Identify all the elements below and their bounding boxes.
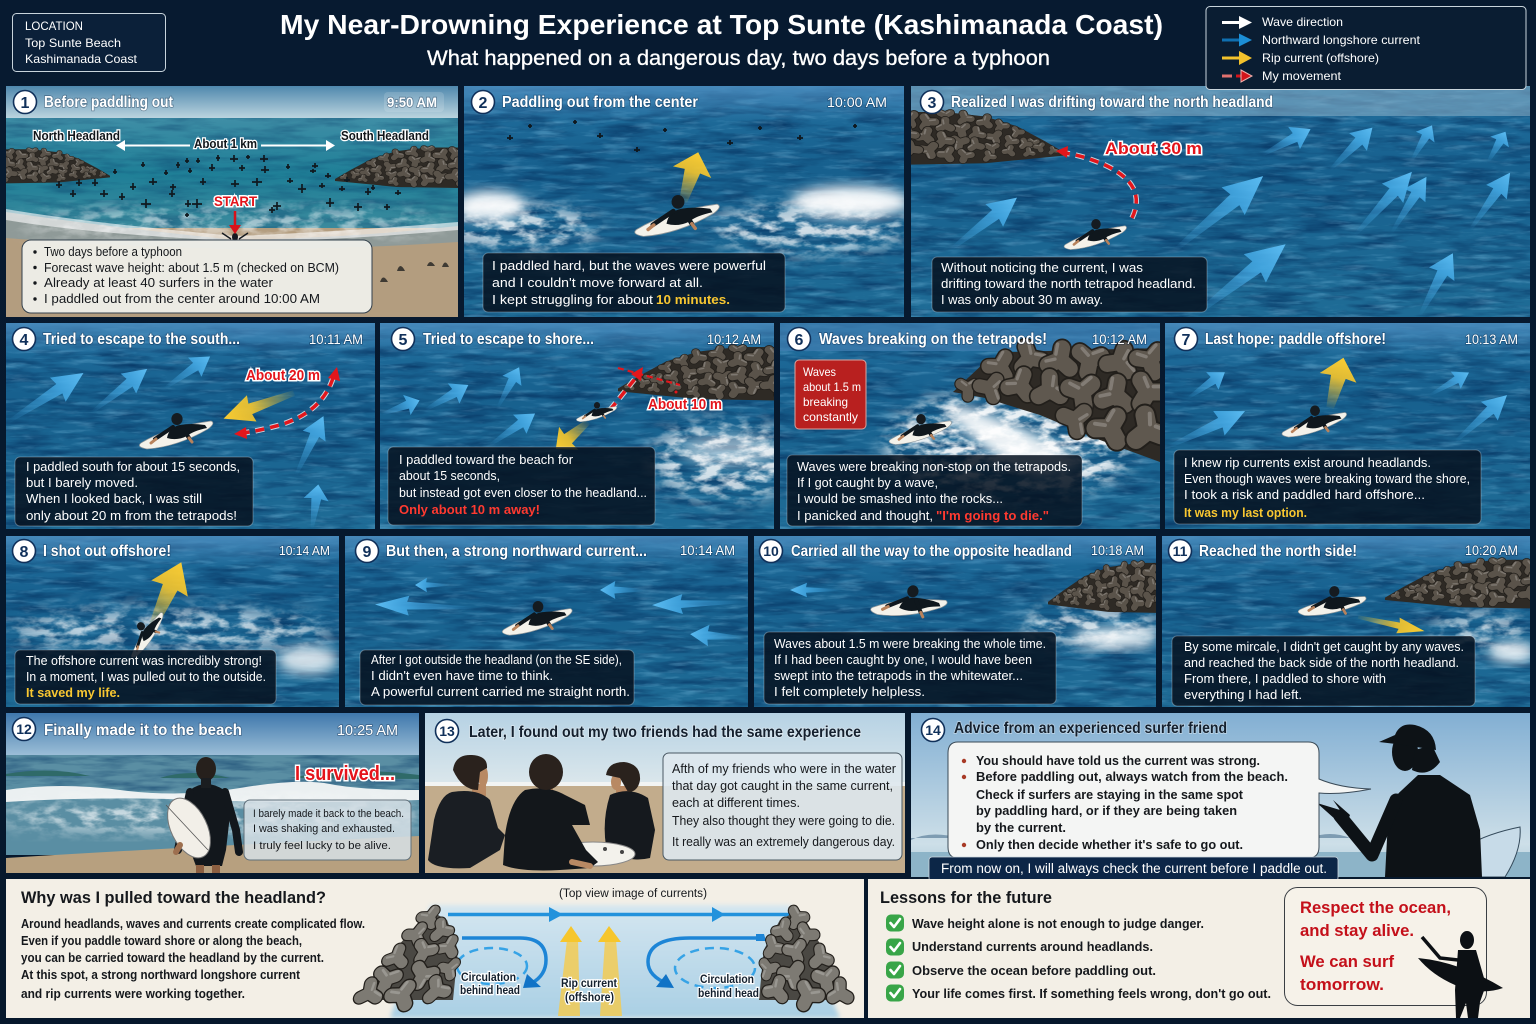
longshore current arrows <box>0 347 335 531</box>
friend silhouette <box>1317 724 1482 877</box>
header: 10:25 AM <box>337 722 398 739</box>
tetrapods <box>953 340 1170 462</box>
header <box>922 718 1227 742</box>
distance label: About 30 m <box>1105 139 1202 158</box>
north headland rocks <box>618 343 810 401</box>
longshore current arrows <box>941 118 1520 329</box>
surfer silhouette <box>1418 931 1503 1018</box>
speech bubble: Check if surfers are staying in the same spot <box>976 788 1244 802</box>
caption <box>483 253 785 312</box>
caption: I truly feel lucky to be alive. <box>253 840 391 852</box>
caption: I was only about 30 m away. <box>941 292 1103 307</box>
checklist: Observe the ocean before paddling out. <box>912 964 1156 978</box>
surfer on board <box>1282 405 1347 437</box>
panel 2: paddling out from the center <box>464 86 904 317</box>
header: 10:13 AM <box>1465 331 1518 347</box>
caption: I paddled hard, but the waves were powerful <box>492 258 766 273</box>
diagram labels: Rip current <box>561 978 617 990</box>
header: 10:14 AM <box>279 543 330 558</box>
caption <box>15 457 253 526</box>
explanation <box>21 917 365 1001</box>
red wave label <box>795 360 866 429</box>
header <box>760 540 1144 562</box>
header <box>1174 328 1518 350</box>
panel 5: escape to shore <box>380 323 774 529</box>
checklist: Understand currents around headlands. <box>912 940 1153 954</box>
caption: Without noticing the current, I was <box>941 260 1144 275</box>
right circulation arrow <box>648 934 766 988</box>
panel: lessons for the future <box>868 879 1530 1018</box>
surfboard <box>1437 827 1520 877</box>
diagram labels: behind head <box>698 988 759 1000</box>
rip current arrow <box>664 146 717 208</box>
surfer on board <box>576 402 617 422</box>
caption: Waves about 1.5 m were breaking the whole time. <box>774 637 1046 651</box>
caption <box>360 650 634 705</box>
caption: swept into the tetrapods in the whitewater... <box>774 669 1023 683</box>
caption: I kept struggling for about <box>492 292 653 307</box>
headland labels: North Headland <box>33 129 120 143</box>
header <box>436 720 861 742</box>
legend: wave direction: Wave direction <box>1262 15 1343 29</box>
info box <box>22 240 372 313</box>
friend three <box>605 762 655 860</box>
caption: each at different times. <box>672 796 800 810</box>
header <box>1168 540 1518 562</box>
diagram labels: Circulation <box>700 974 754 986</box>
longshore current line <box>448 907 800 922</box>
surfboard <box>551 842 635 866</box>
header: 10:18 AM <box>1091 542 1144 558</box>
header: Carried all the way to the opposite headland <box>791 543 1072 560</box>
caption: and I couldn't move forward at all. <box>492 275 703 290</box>
checklist: Wave height alone is not enough to judge danger. <box>912 917 1204 931</box>
header: 9:50 AM <box>387 94 437 110</box>
banner: from now on: From now on, I will always check the current before I paddle out. <box>941 861 1327 876</box>
heading: Why was I pulled toward the headland? <box>21 889 326 907</box>
panel 13: two friends <box>425 713 905 873</box>
header: I shot out offshore! <box>43 543 171 560</box>
header: Paddling out from the center <box>502 94 698 111</box>
location box: Top Sunte Beach <box>25 36 121 50</box>
rip current arrow <box>1312 353 1362 413</box>
longshore current arrow <box>790 583 840 597</box>
surfer at the start point <box>222 233 248 239</box>
message box <box>1284 888 1486 1006</box>
caption: I paddled south for about 15 seconds, <box>26 459 240 474</box>
friend two <box>503 754 598 870</box>
start marker <box>214 193 257 234</box>
panel 14: advice from friend <box>911 713 1530 877</box>
left circulation arrow <box>457 938 546 988</box>
checklist <box>886 914 1271 1002</box>
caption: It really was an extremely dangerous day. <box>672 835 895 849</box>
friend one <box>428 755 505 868</box>
north headland rocks <box>0 147 110 184</box>
legend: rip current: Rip current (offshore) <box>1262 51 1379 65</box>
caption <box>15 650 276 704</box>
header: 12 <box>16 721 32 737</box>
distant surfers <box>507 120 857 152</box>
caption: drifting toward the north tetrapod headland. <box>941 276 1196 291</box>
header: 10 <box>763 543 779 559</box>
caption: In a moment, I was pulled out to the outside. <box>26 670 266 684</box>
info box: Two days before a typhoon <box>44 244 182 259</box>
header: 10:11 AM <box>309 331 363 347</box>
speech bubble: You should have told us the current was strong. <box>976 754 1260 768</box>
header: Waves breaking on the tetrapods! <box>819 331 1047 348</box>
caption: but instead got even closer to the headland... <box>399 485 647 500</box>
header: 7 <box>1182 332 1191 349</box>
subtitle: What happened on a dangerous day, two days before a typhoon <box>427 47 1050 70</box>
header: 3 <box>928 95 937 112</box>
surfer on board <box>889 414 952 445</box>
longshore current arrows <box>1162 363 1515 459</box>
caption <box>932 257 1207 312</box>
caption: I panicked and thought, <box>797 508 933 523</box>
header: 1 <box>21 95 30 112</box>
my movement dashed arrow <box>1056 146 1136 218</box>
info box: I paddled out from the center around 10:00 AM <box>44 291 320 306</box>
header: 14 <box>925 722 941 738</box>
location box: Kashimanada Coast <box>25 52 138 66</box>
header: 10:14 AM <box>680 542 735 558</box>
caption: I didn't even have time to think. <box>371 669 553 683</box>
banner: from now on <box>929 857 1338 881</box>
person with surfboard <box>159 757 239 873</box>
caption: From there, I paddled to shore with <box>1184 672 1386 686</box>
diagram labels: Circulation <box>461 972 516 984</box>
caption: I felt completely helpless. <box>774 685 925 699</box>
panel 4: escape south <box>6 323 375 529</box>
diagram labels <box>460 972 759 1004</box>
caption: Waves were breaking non-stop on the tetrapods. <box>797 459 1071 474</box>
top view current diagram: (Top view image of currents) <box>559 888 707 900</box>
header <box>12 540 330 562</box>
header: 13 <box>439 723 455 739</box>
surfer on board <box>502 601 572 635</box>
caption <box>1174 450 1481 524</box>
caption: If I had been caught by one, I would have been <box>774 653 1032 667</box>
header: 8 <box>20 544 29 561</box>
caption: A powerful current carried me straight north. <box>371 685 630 699</box>
caption: Only about 10 m away! <box>399 502 540 517</box>
header <box>12 328 363 350</box>
explanation: Even if you paddle toward shore or along the beach, <box>21 934 302 948</box>
header: Advice from an experienced surfer friend <box>954 720 1227 737</box>
header: 10:12 AM <box>1092 331 1147 347</box>
headland labels: About 1 km <box>194 137 257 151</box>
panel 3: drifting toward north headland <box>911 86 1530 317</box>
header: But then, a strong northward current... <box>386 543 647 560</box>
panel 11: reached the north side <box>1162 536 1530 707</box>
caption: but I barely moved. <box>26 475 138 490</box>
caption: They also thought they were going to die. <box>672 814 895 828</box>
legend: longshore current: Northward longshore current <box>1262 33 1421 47</box>
foam <box>650 420 800 500</box>
header: Realized I was drifting toward the north headland <box>951 94 1273 111</box>
title: My Near-Drowning Experience at Top Sunte (Kashimanada Coast) <box>280 9 1163 40</box>
south headland rocks <box>335 144 484 188</box>
header <box>920 90 1273 114</box>
message box: tomorrow. <box>1300 975 1384 994</box>
1 km arrow <box>116 140 335 151</box>
rip current arrow <box>1356 609 1426 639</box>
legend: my movement <box>1222 69 1342 83</box>
location box <box>12 14 166 72</box>
caption: If I got caught by a wave, <box>797 475 938 490</box>
top view current diagram <box>357 888 849 1018</box>
rip current arrows <box>558 926 622 1016</box>
caption: The offshore current was incredibly strong! <box>26 654 262 668</box>
panel 12: made it to the beach <box>6 713 419 873</box>
my movement dashed arrows <box>610 367 680 410</box>
speech bubble: Before paddling out, always watch from the beach. <box>976 770 1288 784</box>
caption: I paddled toward the beach for <box>399 452 574 467</box>
header: 6 <box>795 332 804 349</box>
location box: LOCATION <box>25 19 83 33</box>
north headland rocks <box>1048 559 1192 614</box>
surfers in the water <box>56 155 401 217</box>
surfer on board <box>1064 219 1127 250</box>
caption: only about 20 m from the tetrapods! <box>26 508 237 523</box>
panel 10: opposite headland <box>754 536 1156 707</box>
diagram labels: (offshore) <box>565 992 614 1004</box>
caption: It saved my life. <box>26 686 120 700</box>
caption: After I got outside the headland (on the SE side), <box>371 653 622 667</box>
north headland rocks <box>1385 556 1536 609</box>
left tetrapods <box>357 905 473 1006</box>
caption <box>244 800 411 860</box>
header: Finally made it to the beach <box>44 722 242 739</box>
header: Tried to escape to shore... <box>423 331 594 348</box>
caption: Even though waves were breaking toward the shore, <box>1184 471 1470 486</box>
red wave label: constantly <box>803 410 858 424</box>
header: Reached the north side! <box>1199 543 1357 560</box>
breaking waves <box>0 770 427 830</box>
surf line foam <box>6 209 458 241</box>
explanation: you can be carried toward the headland by the current. <box>21 951 324 965</box>
rip current arrow <box>546 411 598 460</box>
speech bubble: Only then decide whether it's safe to go out. <box>976 838 1243 852</box>
start marker: START <box>214 193 257 209</box>
header: Last hope: paddle offshore! <box>1205 331 1386 348</box>
header <box>472 90 887 114</box>
header <box>356 540 735 562</box>
header: 2 <box>479 95 488 112</box>
foam at the rocks <box>885 390 1135 500</box>
rip current arrow <box>134 554 200 636</box>
header <box>14 90 444 114</box>
foam <box>440 186 910 252</box>
header: 9 <box>363 544 372 561</box>
header: 11 <box>1173 543 1188 559</box>
headland labels <box>33 129 429 151</box>
checklist: Your life comes first. If something feels wrong, don't go out. <box>912 987 1271 1001</box>
caption <box>663 753 902 860</box>
longshore current arrows <box>375 578 746 649</box>
surfer on board <box>1298 583 1367 622</box>
header: Tried to escape to the south... <box>43 331 240 348</box>
my movement dashed arrow <box>234 367 340 439</box>
caption: I was shaking and exhausted. <box>253 823 395 835</box>
caption: I took a risk and paddled hard offshore... <box>1184 487 1425 502</box>
red wave label: Waves <box>803 365 836 379</box>
surfer on board <box>118 607 174 659</box>
caption: everything I had left. <box>1184 688 1302 702</box>
north headland rocks <box>873 108 1065 165</box>
caption: that day got caught in the same current, <box>672 779 893 793</box>
speech bubble: by paddling hard, or if they are being taken <box>976 804 1237 818</box>
explanation: At this spot, a strong northward longshore current <box>21 968 301 982</box>
header <box>788 328 1147 350</box>
surfer on board <box>139 413 213 449</box>
caption: By some mircale, I didn't get caught by any waves. <box>1184 640 1464 654</box>
speech bubble: by the current. <box>976 821 1066 835</box>
distance label: About 20 m <box>246 368 320 384</box>
caption: It was my last option. <box>1184 505 1307 520</box>
rip current arrow <box>219 380 299 432</box>
legend <box>1206 6 1526 90</box>
panel 6: waves on tetrapods <box>780 323 1160 529</box>
header: 10:20 AM <box>1465 542 1518 558</box>
info box: Forecast wave height: about 1.5 m (checked on BCM) <box>44 260 339 275</box>
header: Before paddling out <box>44 94 173 111</box>
three friends sitting <box>428 754 655 870</box>
sand <box>6 836 419 873</box>
header: 5 <box>399 332 408 349</box>
caption <box>764 632 1056 704</box>
headland labels: South Headland <box>341 129 429 143</box>
panel: why was I pulled <box>6 879 864 1018</box>
people on the beach <box>380 262 449 282</box>
panel 8: shot out offshore <box>6 536 339 707</box>
message box: and stay alive. <box>1300 921 1414 940</box>
explanation: Around headlands, waves and currents create complicated flow. <box>21 917 365 931</box>
foam <box>5 608 338 674</box>
caption <box>1172 636 1475 706</box>
header: 10:12 AM <box>707 331 761 347</box>
longshore current arrows <box>378 362 542 455</box>
caption: "I'm going to die." <box>936 508 1049 523</box>
panel 7: paddle offshore <box>1165 323 1530 529</box>
header: Later, I found out my two friends had the same experience <box>469 724 861 741</box>
explanation: and rip currents were working together. <box>21 987 245 1001</box>
surfer on board <box>635 195 719 236</box>
header: 4 <box>20 332 29 349</box>
surfer on board <box>870 578 949 628</box>
message box: We can surf <box>1300 952 1394 971</box>
caption: about 15 seconds, <box>399 468 500 483</box>
speech bubble <box>948 742 1371 858</box>
caption: I knew rip currents exist around headlands. <box>1184 455 1431 470</box>
legend: my movement: My movement <box>1262 69 1342 83</box>
caption: I barely made it back to the beach. <box>253 808 404 820</box>
panel 9: northward current <box>345 536 748 707</box>
distance label: About 10 m <box>648 397 722 413</box>
caption <box>388 447 655 525</box>
panel 1: before paddling out <box>6 86 458 317</box>
red wave label: breaking <box>803 395 848 409</box>
info box: Already at least 40 surfers in the water <box>44 275 274 290</box>
caption: I would be smashed into the rocks... <box>797 491 1003 506</box>
header <box>12 718 398 740</box>
red wave label: about 1.5 m <box>803 380 861 394</box>
right tetrapods <box>758 905 849 1006</box>
header: 10:00 AM <box>827 94 887 110</box>
foam <box>1020 605 1160 648</box>
caption <box>787 455 1082 526</box>
survived callout: I survived... <box>295 763 395 785</box>
caption: 10 minutes. <box>656 292 730 307</box>
caption: and reached the back side of the north headland. <box>1184 656 1459 670</box>
message box: Respect the ocean, <box>1300 898 1451 917</box>
diagram labels: behind head <box>460 985 520 997</box>
foam <box>1430 612 1536 662</box>
caption: Afth of my friends who were in the water <box>672 762 896 776</box>
legend: wave direction <box>1222 15 1343 29</box>
header <box>392 328 761 350</box>
heading: Lessons for the future <box>880 889 1052 907</box>
caption: When I looked back, I was still <box>26 491 202 506</box>
